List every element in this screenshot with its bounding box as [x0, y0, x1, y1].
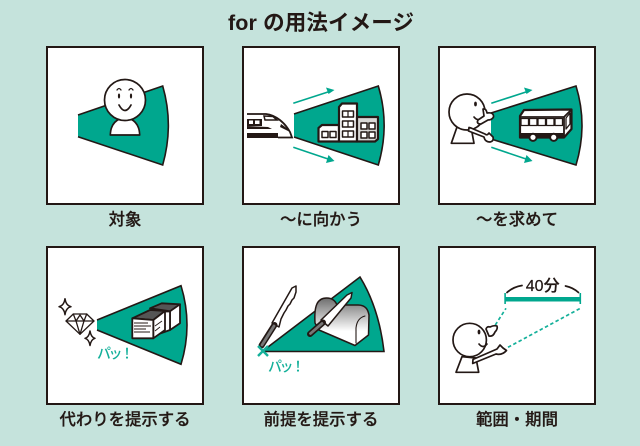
- icon: person calling: [449, 94, 494, 143]
- icon: sparkle upper: [59, 299, 71, 315]
- text: パッ！: パッ！: [97, 346, 134, 362]
- icon: smiling person: [104, 80, 146, 135]
- panel: 対象: [47, 47, 203, 204]
- icon: bus: [520, 110, 572, 141]
- icon: bread: [315, 298, 369, 346]
- label: 範囲・期間: 範囲・期間: [476, 411, 558, 429]
- spotlight fan: [294, 86, 384, 165]
- icon: diamond: [66, 314, 94, 334]
- icon: sparkle lower: [85, 331, 95, 346]
- text: パッ！: パッ！: [268, 358, 305, 374]
- panel frame: [243, 247, 399, 404]
- panel: ～に向かう: [243, 47, 399, 204]
- arrow: lower: [491, 147, 532, 163]
- brace left: [507, 286, 522, 292]
- arrow: upper: [293, 88, 334, 103]
- label: 対象: 対象: [109, 210, 141, 229]
- panel: 前提を提示する: [243, 247, 399, 404]
- icon: cross mark: [258, 346, 268, 356]
- icon: boxes: [132, 303, 180, 338]
- label: 前提を提示する: 前提を提示する: [264, 411, 378, 429]
- dashed guide upper: [495, 308, 506, 325]
- panel frame: [47, 47, 203, 204]
- icon: left knife: [262, 286, 296, 346]
- title: for の用法イメージ: [228, 11, 414, 35]
- icon: bread crease: [356, 316, 365, 343]
- dashed guide lower: [508, 308, 580, 347]
- arrow: upper: [491, 88, 532, 103]
- icon: person pointing: [453, 323, 506, 372]
- brace right: [566, 286, 578, 292]
- icon: buildings: [318, 104, 378, 142]
- panel: 代わりを提示する: [47, 247, 203, 404]
- panel frame: [439, 47, 595, 204]
- label: 代わりを提示する: 代わりを提示する: [59, 411, 191, 429]
- panel frame: [439, 247, 595, 404]
- spotlight fan: [97, 286, 187, 364]
- spotlight fan: [263, 277, 384, 352]
- panel: ～を求めて: [439, 47, 595, 204]
- arrow: lower: [293, 147, 334, 163]
- icon: right knife: [310, 292, 352, 334]
- icon: bullet train: [247, 114, 292, 138]
- duration bar: [504, 293, 581, 304]
- label: ～を求めて: ～を求めて: [476, 211, 558, 229]
- label: ～に向かう: ～に向かう: [280, 211, 362, 229]
- spotlight fan: [491, 86, 582, 165]
- text: 40分: 40分: [526, 277, 560, 295]
- panel frame: [243, 47, 399, 204]
- panel: 範囲・期間: [439, 247, 595, 404]
- spotlight fan: [78, 86, 168, 165]
- panel frame: [47, 247, 203, 404]
